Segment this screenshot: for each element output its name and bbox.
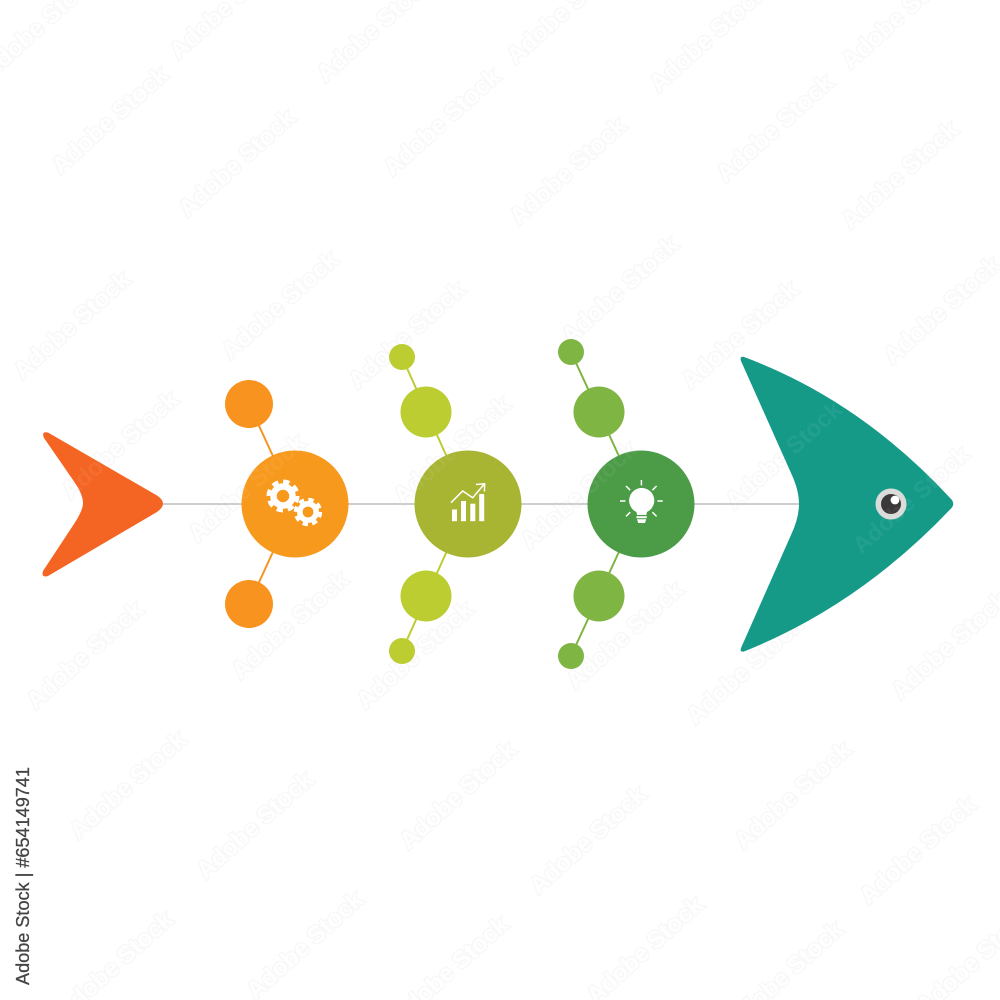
olive upper tip <box>389 344 415 370</box>
stock id side label: Adobe Stock | #654149741 <box>13 767 33 985</box>
green lower node <box>574 570 624 622</box>
orange branch <box>225 380 348 628</box>
fish head <box>741 357 953 652</box>
watermark pattern on background: Adobe Stock <box>524 781 652 900</box>
watermark pattern on background: Adobe Stock <box>729 736 857 855</box>
green main circle <box>588 450 694 558</box>
watermark pattern on background: Adobe Stock <box>216 246 344 365</box>
watermark pattern on background: Adobe Stock <box>676 276 804 395</box>
watermark pattern on background: Adobe Stock <box>173 104 301 223</box>
olive lower node <box>400 570 452 622</box>
watermark pattern on background: Adobe Stock <box>21 596 149 715</box>
olive main circle <box>414 450 522 558</box>
watermark pattern on background: Adobe Stock <box>351 596 479 715</box>
orange upper node <box>225 380 273 428</box>
orange main circle <box>242 450 348 558</box>
watermark pattern on background: Adobe Stock <box>343 276 471 395</box>
olive bones <box>402 357 468 651</box>
watermark over shapes: Adobe Stock <box>183 429 311 548</box>
watermark pattern on background: Adobe Stock <box>226 566 354 685</box>
watermark over shapes <box>56 386 975 560</box>
watermark pattern on background: Adobe Stock <box>183 429 311 548</box>
olive lower tip <box>389 638 415 664</box>
olive upper node <box>400 386 452 438</box>
watermark pattern on background: Adobe Stock <box>56 386 184 505</box>
icon: growth chart <box>451 484 485 521</box>
watermark pattern on background: Adobe Stock <box>847 441 975 560</box>
watermark over shapes: Adobe Stock <box>720 396 848 515</box>
watermark pattern on background: Adobe Stock <box>8 266 136 385</box>
icon: gears <box>269 482 320 524</box>
watermark over shapes: Adobe Stock <box>515 436 643 555</box>
watermark pattern on background: Adobe Stock <box>46 61 174 180</box>
watermark pattern on background: Adobe Stock <box>836 116 964 235</box>
green bones <box>571 352 641 656</box>
watermark pattern on background: Adobe Stock <box>388 391 516 510</box>
green upper tip <box>558 339 584 365</box>
watermark pattern on background: Adobe Stock <box>561 576 689 695</box>
orange bones <box>249 404 295 604</box>
watermark pattern on background: Adobe Stock <box>64 726 192 845</box>
fish tail <box>43 432 163 576</box>
watermark pattern on background: Adobe Stock <box>504 112 632 231</box>
eye <box>876 488 906 520</box>
head shape <box>741 357 953 652</box>
watermark pattern on background: Adobe Stock <box>378 63 506 182</box>
icon: light bulb <box>620 480 663 523</box>
watermark pattern on background: Adobe Stock <box>556 231 684 350</box>
watermark pattern on background: Adobe Stock <box>720 396 848 515</box>
watermark pattern on background: Adobe Stock <box>711 69 839 188</box>
watermark pattern on background: Adobe Stock <box>191 766 319 885</box>
watermark pattern on background: Adobe Stock <box>515 436 643 555</box>
fish spine <box>160 503 802 505</box>
green upper node <box>574 386 624 438</box>
orange lower node <box>225 580 273 628</box>
green lower tip <box>558 643 584 669</box>
olive branch <box>389 344 522 664</box>
green branch <box>558 339 694 669</box>
watermark over shapes: Adobe Stock <box>56 386 184 505</box>
watermark pattern on background: Adobe Stock <box>394 736 522 855</box>
watermark pattern on background: Adobe Stock <box>854 791 982 910</box>
watermark over shapes: Adobe Stock <box>388 391 516 510</box>
watermark over shapes: Adobe Stock <box>847 441 975 560</box>
watermark pattern on background: Adobe Stock <box>681 611 809 730</box>
